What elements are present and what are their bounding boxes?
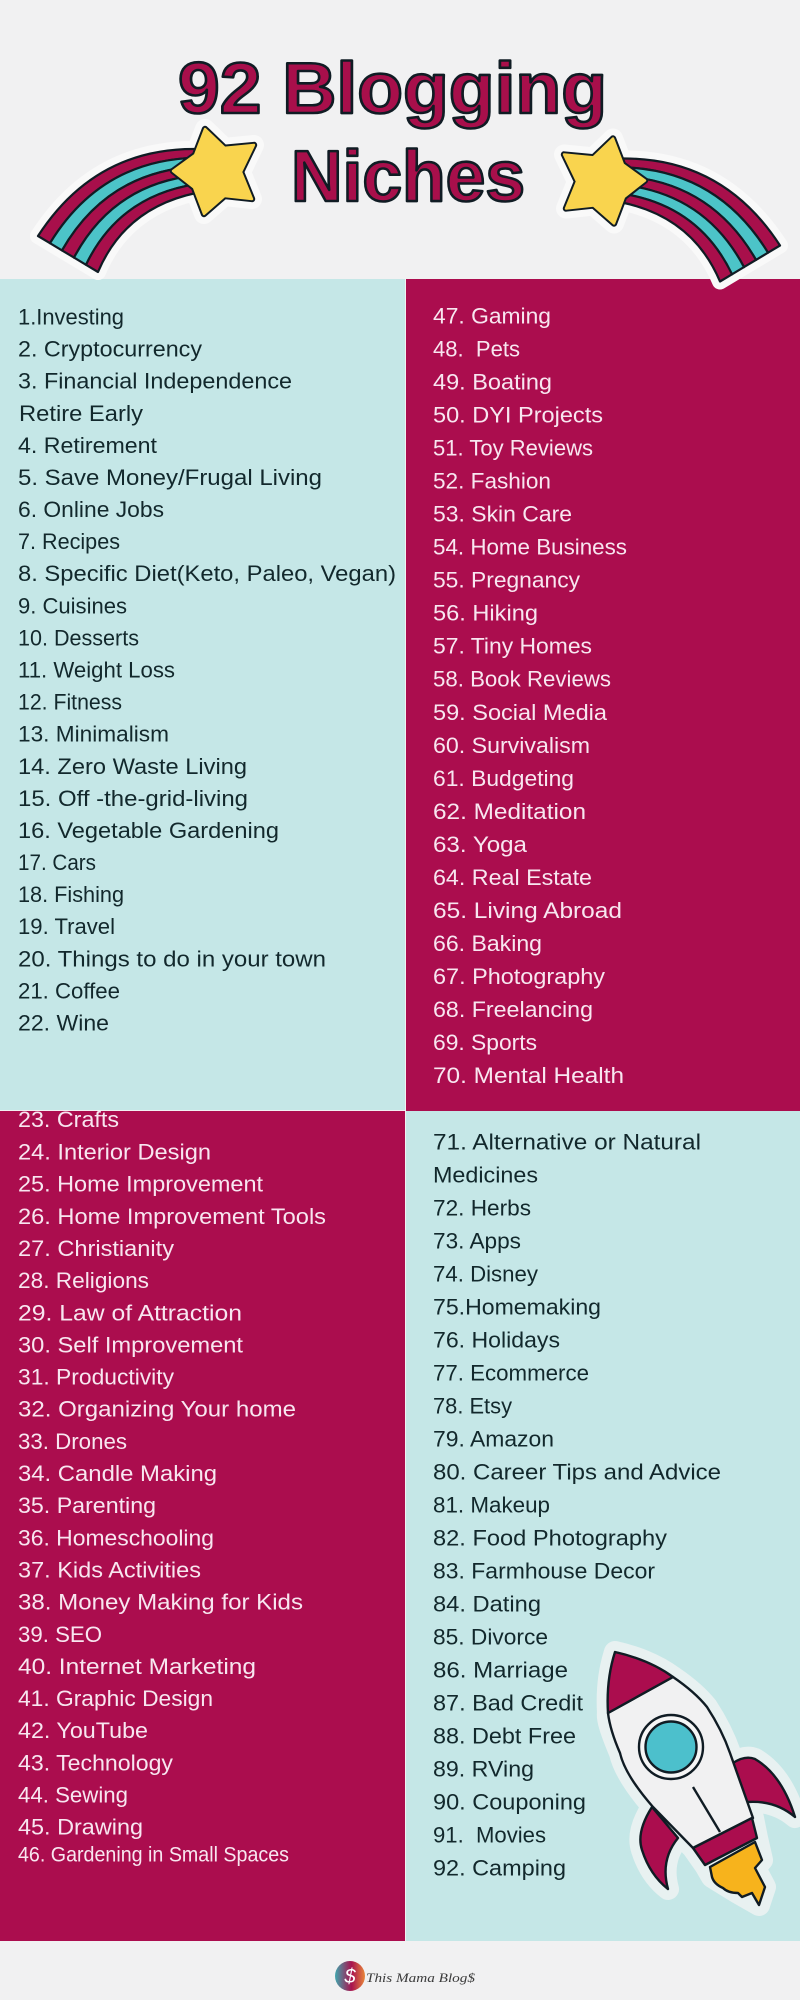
text block: items 71 to 92: 75.Homemaking xyxy=(433,1294,601,1319)
text block: items 23 to 46: 31. Productivity xyxy=(18,1365,174,1390)
icon: rocket right fin xyxy=(733,1758,795,1817)
text block: items 47 to 70: 49. Boating xyxy=(433,369,552,394)
text block: items 47 to 70: 55. Pregnancy xyxy=(433,568,580,593)
icon: rocket flame xyxy=(710,1842,765,1905)
text block: items 1 to 22: 14. Zero Waste Living xyxy=(18,754,247,779)
text block: items 47 to 70: 57. Tiny Homes xyxy=(433,634,592,659)
text block: items 23 to 46: 24. Interior Design xyxy=(18,1140,211,1164)
text block: items 71 to 92: 80. Career Tips and Advice xyxy=(433,1459,721,1484)
text block: items 23 to 46: 38. Money Making for Kids xyxy=(18,1590,303,1615)
text block: items 47 to 70: 59. Social Media xyxy=(433,700,608,725)
text block: items 23 to 46: 41. Graphic Design xyxy=(18,1686,213,1711)
text block: items 1 to 22: 18. Fishing xyxy=(18,882,124,907)
icon: rocket band xyxy=(693,1818,757,1865)
panel: lower right items 71-92 xyxy=(406,1111,800,1941)
text block: items 47 to 70: 61. Budgeting xyxy=(433,766,574,791)
text block: items 47 to 70: 66. Baking xyxy=(433,931,542,956)
text block: items 71 to 92: 79. Amazon xyxy=(433,1426,554,1451)
text block: items 23 to 46: 40. Internet Marketing xyxy=(18,1654,256,1679)
text block: items 71 to 92: 89. RVing xyxy=(433,1756,534,1781)
text block: items 1 to 22: 12. Fitness xyxy=(18,690,122,715)
text block: items 47 to 70: 67. Photography xyxy=(433,964,605,989)
text block: items 47 to 70: 52. Fashion xyxy=(433,468,551,494)
text block: items 23 to 46: 45. Drawing xyxy=(18,1815,143,1840)
text block: items 71 to 92: 77. Ecommerce xyxy=(433,1360,589,1385)
text block: items 23 to 46: 36. Homeschooling xyxy=(18,1525,214,1550)
text block: items 71 to 92: 92. Camping xyxy=(433,1855,566,1880)
text block: items 71 to 92: 88. Debt Free xyxy=(433,1723,576,1748)
icon: logo circle: $ xyxy=(343,1966,356,1988)
icon: left shooting star rainbow xyxy=(38,129,254,272)
text block: items 1 to 22: 8. Specific Diet(Keto, Paleo, Vegan) xyxy=(18,561,396,586)
text block: items 1 to 22: 20. Things to do in your town xyxy=(18,946,326,971)
text block: items 47 to 70: 60. Survivalism xyxy=(433,733,590,758)
text block: items 23 to 46: 39. SEO xyxy=(18,1622,102,1647)
text block: items 23 to 46: 26. Home Improvement Tools xyxy=(18,1204,326,1229)
text block: items 1 to 22: 7. Recipes xyxy=(18,529,120,554)
text block: items 23 to 46: 42. YouTube xyxy=(18,1718,148,1743)
icon: rocket left fin xyxy=(640,1807,678,1889)
text block: items 47 to 70: 50. DYI Projects xyxy=(433,402,603,427)
text block: items 47 to 70: 48. Pets xyxy=(433,336,520,361)
text block: items 47 to 70: 47. Gaming xyxy=(433,303,551,328)
panel: upper right items 47-70 xyxy=(406,279,800,1111)
text block: items 71 to 92: 73. Apps xyxy=(433,1228,521,1253)
text block: items 71 to 92: 91. Movies xyxy=(433,1822,546,1847)
panel: upper left items 1-22 xyxy=(0,279,405,1110)
text: logo wordmark: This Mama Blog$ xyxy=(366,1970,476,1985)
text block: items 47 to 70: 65. Living Abroad xyxy=(433,898,622,923)
text block: items 71 to 92: 90. Couponing xyxy=(433,1789,586,1814)
text block: items 23 to 46: 27. Christianity xyxy=(18,1236,174,1261)
text block: items 71 to 92: 87. Bad Credit xyxy=(433,1690,583,1715)
text block: items 71 to 92: 74. Disney xyxy=(433,1261,538,1286)
text block: items 71 to 92: 78. Etsy xyxy=(433,1393,512,1418)
text block: items 1 to 22: 6. Online Jobs xyxy=(18,497,164,522)
text block: items 23 to 46: 35. Parenting xyxy=(18,1493,156,1518)
text block: items 71 to 92: 83. Farmhouse Decor xyxy=(433,1558,655,1583)
text block: items 47 to 70: 62. Meditation xyxy=(433,799,586,824)
text block: items 23 to 46 xyxy=(18,1107,326,1867)
text block: items 1 to 22: 4. Retirement xyxy=(18,433,157,458)
text block: items 23 to 46: 43. Technology xyxy=(18,1750,173,1775)
text block: items 71 to 92: 72. Herbs xyxy=(433,1195,531,1220)
text block: items 47 to 70: 53. Skin Care xyxy=(433,502,572,526)
text block: items 23 to 46: 46. Gardening in Small Spaces xyxy=(18,1844,289,1867)
text block: items 71 to 92 xyxy=(433,1129,721,1880)
text block: items 1 to 22: 13. Minimalism xyxy=(18,722,169,747)
icon: rocket window xyxy=(639,1715,703,1779)
icon: right shooting star rainbow xyxy=(564,138,780,282)
text block: items 1 to 22: 2. Cryptocurrency xyxy=(18,337,202,362)
text block: items 1 to 22: 9. Cuisines xyxy=(18,593,127,618)
icon: rocket nose xyxy=(608,1652,673,1713)
panel: lower left items 23-46 xyxy=(0,1107,405,1941)
text block: items 1 to 22 xyxy=(18,304,396,1036)
text block: items 47 to 70: 51. Toy Reviews xyxy=(433,436,593,460)
text block: items 23 to 46: 25. Home Improvement xyxy=(18,1172,263,1197)
title: 92 Blogging xyxy=(178,49,607,129)
text block: items 47 to 70 xyxy=(433,303,627,1088)
text block: items 23 to 46: 34. Candle Making xyxy=(18,1461,217,1486)
title xyxy=(178,49,607,217)
text block: items 23 to 46: 29. Law of Attraction xyxy=(18,1300,242,1325)
text block: items 1 to 22: 19. Travel xyxy=(18,914,115,939)
text block: items 1 to 22: 1.Investing xyxy=(18,304,124,330)
text block: items 1 to 22: 22. Wine xyxy=(18,1010,109,1036)
text block: items 23 to 46: 33. Drones xyxy=(18,1429,127,1454)
text block: items 47 to 70: 68. Freelancing xyxy=(433,997,593,1022)
footer logo xyxy=(335,1961,476,1991)
text block: items 71 to 92: 84. Dating xyxy=(433,1591,541,1616)
icon: rocket body line xyxy=(693,1787,720,1832)
text block: items 71 to 92: 81. Makeup xyxy=(433,1492,550,1517)
text block: items 47 to 70: 70. Mental Health xyxy=(433,1063,624,1088)
text block: items 47 to 70: 64. Real Estate xyxy=(433,865,592,890)
text block: items 23 to 46: 23. Crafts xyxy=(18,1107,119,1132)
text block: items 1 to 22: 15. Off -the-grid-living xyxy=(18,786,248,811)
text block: items 23 to 46: 28. Religions xyxy=(18,1268,149,1293)
text block: items 47 to 70: 63. Yoga xyxy=(433,832,528,857)
text block: items 23 to 46: 32. Organizing Your home xyxy=(18,1397,296,1422)
text block: items 23 to 46: 37. Kids Activities xyxy=(18,1558,201,1582)
text block: items 23 to 46: 30. Self Improvement xyxy=(18,1332,243,1357)
text block: items 1 to 22: 5. Save Money/Frugal Living xyxy=(18,465,322,490)
text block: items 47 to 70: 58. Book Reviews xyxy=(433,667,611,692)
text block: items 1 to 22: 16. Vegetable Gardening xyxy=(18,818,279,843)
icon: rocket xyxy=(608,1652,795,1905)
text block: items 71 to 92: 76. Holidays xyxy=(433,1327,560,1352)
icon: logo circle xyxy=(335,1961,365,1991)
text block: items 47 to 70: 56. Hiking xyxy=(433,601,538,626)
text block: items 71 to 92: Medicines xyxy=(433,1162,538,1187)
text block: items 1 to 22: 3. Financial Independence xyxy=(18,369,292,394)
icon: rocket body xyxy=(608,1677,753,1848)
text block: items 71 to 92: 85. Divorce xyxy=(433,1624,548,1649)
text block: items 1 to 22: 11. Weight Loss xyxy=(18,658,175,682)
text block: items 71 to 92: 86. Marriage xyxy=(433,1657,568,1682)
text block: items 47 to 70: 69. Sports xyxy=(433,1030,537,1055)
text block: items 71 to 92: 82. Food Photography xyxy=(433,1525,667,1550)
text block: items 1 to 22: 21. Coffee xyxy=(18,978,120,1003)
text block: items 1 to 22: Retire Early xyxy=(19,401,143,426)
title: Niches xyxy=(291,137,525,217)
text block: items 71 to 92: 71. Alternative or Natural xyxy=(433,1129,701,1154)
text block: items 47 to 70: 54. Home Business xyxy=(433,535,627,560)
text block: items 1 to 22: 17. Cars xyxy=(18,850,96,875)
text block: items 1 to 22: 10. Desserts xyxy=(18,625,139,650)
text block: items 23 to 46: 44. Sewing xyxy=(18,1782,128,1808)
